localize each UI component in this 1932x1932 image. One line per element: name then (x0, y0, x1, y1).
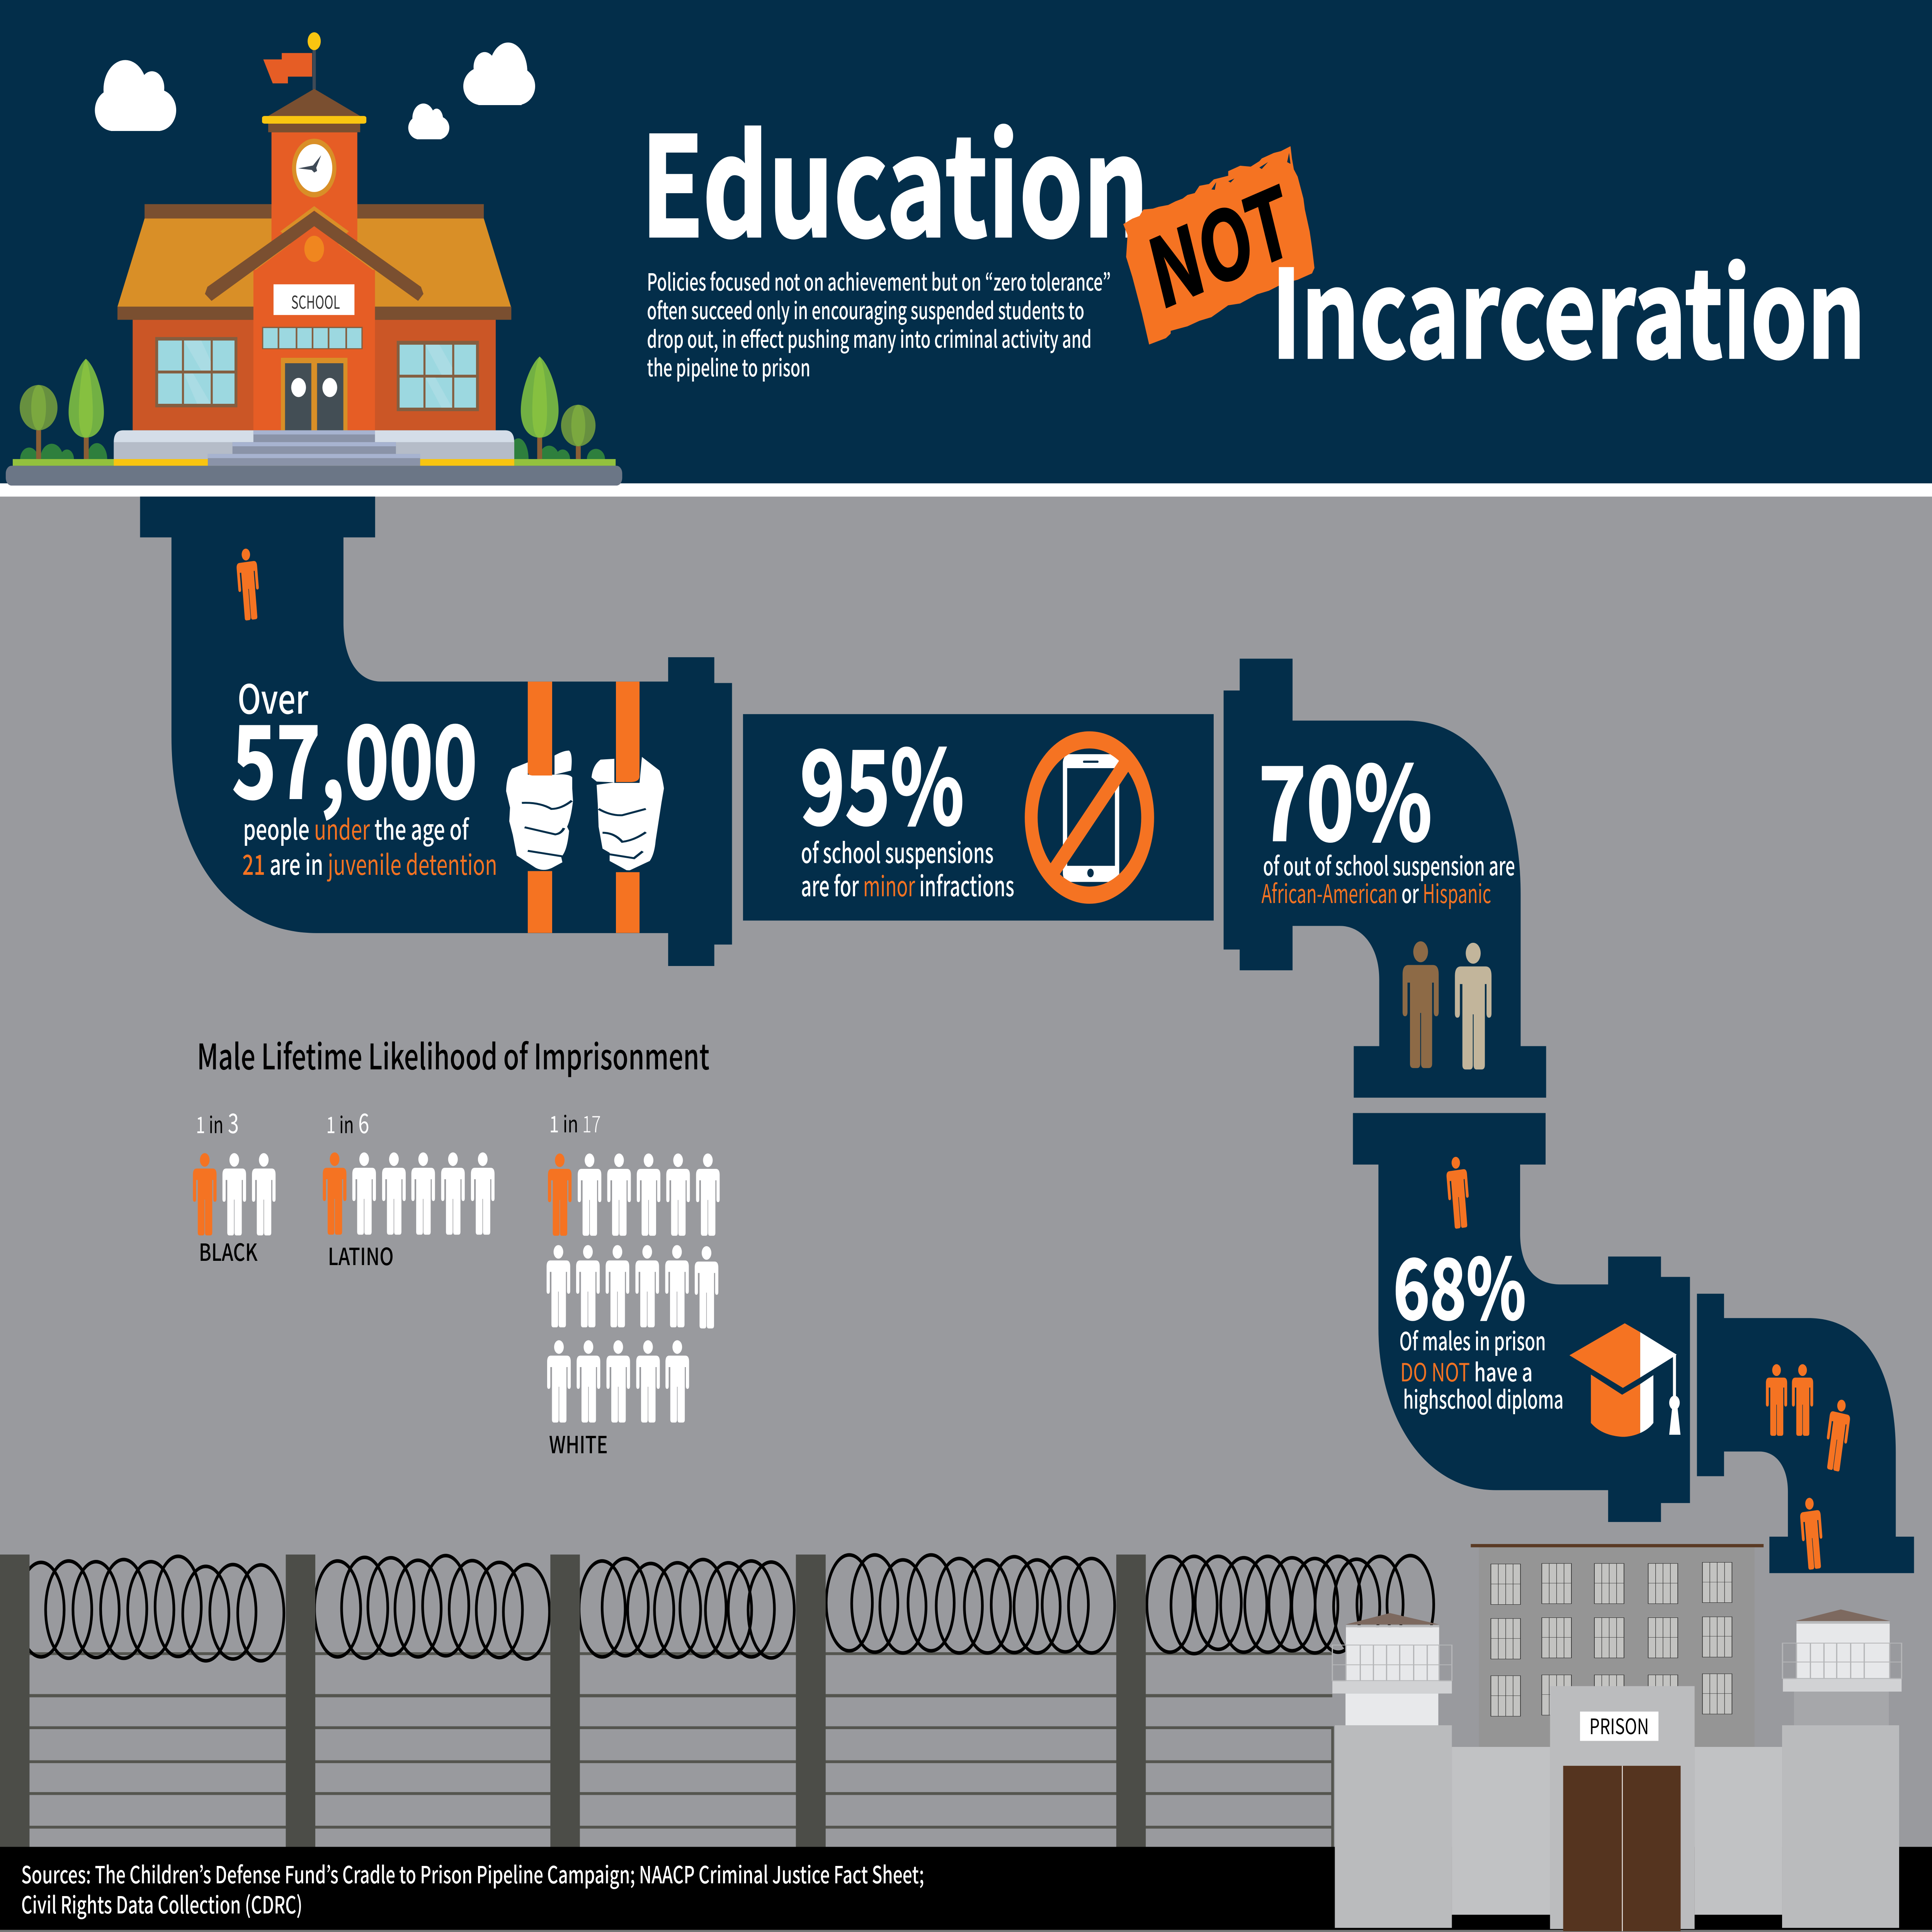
stat: over 57,000 (232, 668, 497, 883)
stat: 70% (1259, 723, 1515, 910)
pipe section 3: race of suspended students (1224, 659, 1546, 1098)
trees and bushes (20, 357, 605, 480)
stat: 70%: 70% (1259, 723, 1432, 870)
clouds (95, 43, 535, 139)
stat: 95%: are for minor infractions (801, 864, 1014, 905)
icon: hands gripping bars (506, 682, 664, 933)
clock tower (262, 89, 366, 244)
razor wire fence (0, 1554, 1434, 1848)
stat: 70%: of out of school suspension are (1263, 846, 1515, 883)
stat: 68%: Of males in prison (1400, 1322, 1546, 1358)
stat: 68%: DO NOT have a (1400, 1353, 1533, 1389)
sources footer (0, 1847, 1932, 1932)
chart group: latino 1 in 6: LATINO (328, 1238, 394, 1272)
flag and pole (263, 32, 321, 89)
chart group: black 1 in 3 (193, 1102, 276, 1268)
icon: graduation cap (1570, 1323, 1680, 1437)
icon: no phone (1031, 740, 1148, 895)
roof (117, 204, 511, 430)
chart group: black 1 in 3: BLACK (199, 1233, 258, 1268)
icon: falling person (235, 547, 261, 621)
right watch tower (1782, 1609, 1901, 1725)
icon: two men (1403, 941, 1492, 1070)
icon: school building (6, 32, 622, 486)
stat: over 57,000: 21 are in juvenile detention (242, 843, 497, 883)
entrance block (205, 208, 423, 430)
stat: 95% (800, 706, 1014, 905)
intro paragraph (647, 263, 1111, 383)
stat: 70%: African-American or Hispanic (1262, 873, 1491, 910)
intro paragraph: the pipeline to prison (647, 349, 810, 383)
prison (1332, 1544, 1901, 1931)
stat: over 57,000: 57,000 (232, 682, 477, 827)
heading: male lifetime likelihood of imprisonment: Male Lifetime Likelihood of Imprisonment (197, 1029, 709, 1080)
school sign text: SCHOOL (291, 288, 340, 314)
header band (0, 0, 1932, 497)
stat: over 57,000: Over (238, 668, 308, 726)
stat: 95%: 95% (800, 706, 964, 854)
intro paragraph: Policies focused not on achievement but on “zero tolerance” (647, 263, 1111, 298)
icon: falling person (1445, 1155, 1471, 1230)
chart group: white 1 in 17: 1 in 17 (549, 1106, 601, 1139)
side windows (155, 337, 479, 411)
chart group: white 1 in 17 (547, 1106, 719, 1460)
pipe section 2: minor infractions (743, 706, 1214, 920)
sources footer: Civil Rights Data Collection (CDRC) (21, 1886, 303, 1920)
intro paragraph: often succeed only in encouraging suspended students to (647, 292, 1084, 326)
stat: over 57,000: people under the age of (243, 808, 470, 848)
stat: 95%: of school suspensions (801, 831, 994, 871)
plinth, steps and ground (6, 430, 622, 486)
stamp: NOT: NOT (1135, 146, 1303, 336)
sources footer: Sources: The Children’s Defense Fund’s Cradle to Prison Pipeline Campaign; NAACP Criminal Justice Fact Sheet; (21, 1856, 924, 1890)
walls and gate (1335, 1686, 1899, 1931)
stat: 68%: 68% (1393, 1223, 1526, 1343)
pipe section 4: no diploma (1353, 1113, 1690, 1522)
cell block (1471, 1544, 1764, 1747)
chart group: black 1 in 3: 1 in 3 (196, 1102, 239, 1141)
chart group: latino 1 in 6 (323, 1102, 495, 1272)
pipe section 5: outlet to prison (1697, 1294, 1914, 1573)
pipe section 1: juvenile detention (140, 497, 732, 966)
intro paragraph: drop out, in effect pushing many into criminal activity and (647, 320, 1092, 355)
prison sign text: PRISON (1589, 1710, 1649, 1741)
chart group: latino 1 in 6: 1 in 6 (326, 1102, 369, 1141)
stat: 68%: highschool diploma (1403, 1380, 1564, 1416)
chart group: white 1 in 17: WHITE (549, 1426, 608, 1460)
icon: people in pipe (1766, 1364, 1852, 1570)
title: Education: Education (641, 77, 1149, 276)
left watch tower (1332, 1613, 1452, 1725)
title: Incarceration: Incarceration (1271, 218, 1866, 393)
stat: 68% (1393, 1223, 1564, 1416)
